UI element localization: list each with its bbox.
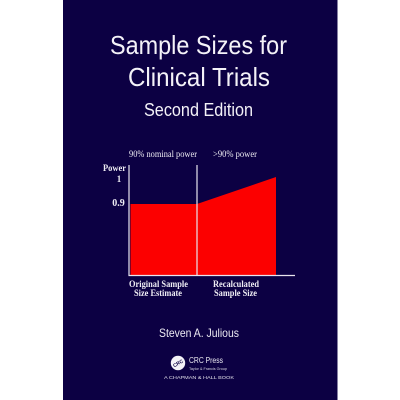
chart labels: 1 <box>117 174 122 184</box>
axes and divider <box>129 165 295 276</box>
title: Sample Sizes for <box>110 30 287 60</box>
publisher logo <box>164 356 234 380</box>
book cover panel <box>63 0 338 400</box>
red area: original sample size <box>130 204 197 275</box>
chart labels: 0.9 <box>112 198 125 209</box>
chart labels: 90% nominal power <box>129 149 197 159</box>
chart labels: Power <box>103 163 126 173</box>
chart labels: >90% power <box>213 149 257 159</box>
title: Clinical Trials <box>128 62 270 92</box>
chart: power vs sample size <box>103 149 295 299</box>
subtitle: Second Edition <box>144 100 253 120</box>
chart labels: Recalculated <box>213 280 260 290</box>
publisher group: Taylor & Francis Group <box>189 366 228 371</box>
chart labels: Size Estimate <box>134 289 182 299</box>
icon: CRC circle <box>171 356 185 370</box>
red area: recalculated sample size <box>197 177 276 275</box>
imprint: A CHAPMAN & HALL BOOK <box>164 375 234 380</box>
publisher name: CRC Press <box>189 356 223 365</box>
publisher logo: CRC <box>172 358 185 369</box>
chart labels: Sample Size <box>214 289 257 299</box>
chart labels <box>103 149 260 299</box>
author: Steven A. Julious <box>159 326 239 340</box>
title <box>110 30 287 92</box>
chart labels: Original Sample <box>129 280 188 290</box>
